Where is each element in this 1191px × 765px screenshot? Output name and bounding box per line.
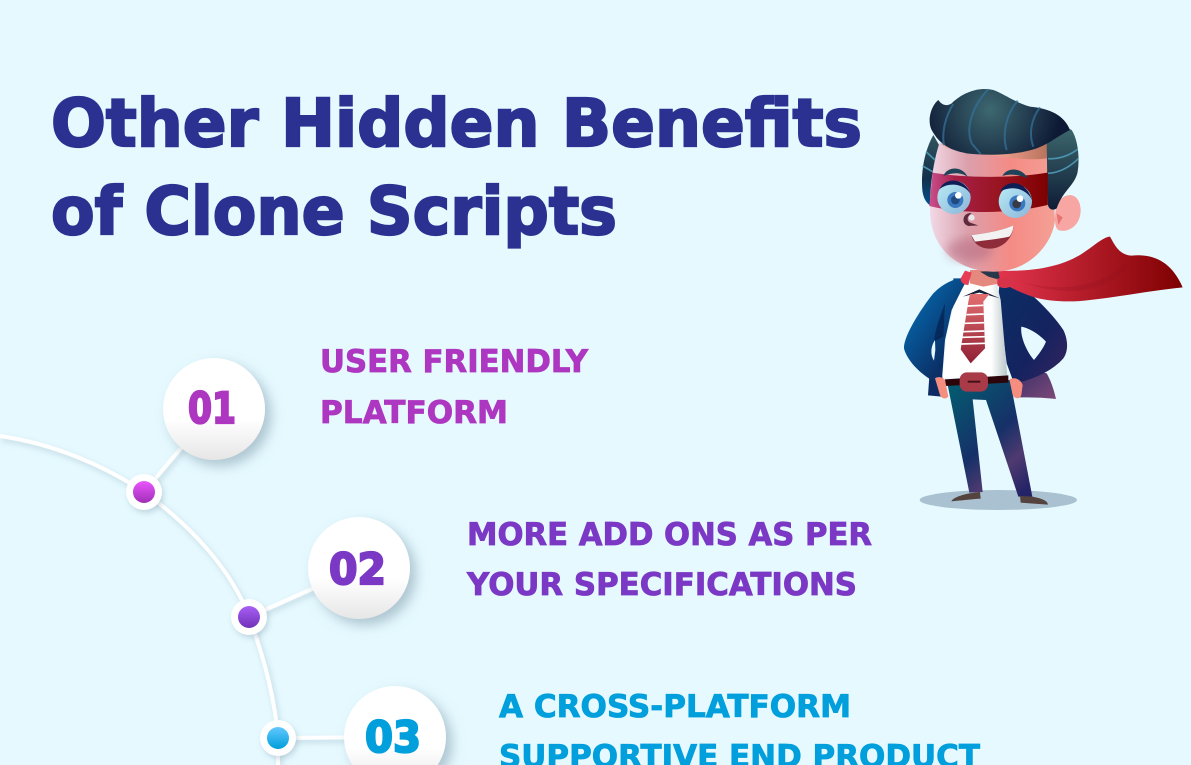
legs — [947, 380, 1032, 497]
label 01: USER FRIENDLY — [320, 344, 589, 380]
back hair — [922, 135, 940, 206]
hands — [935, 377, 948, 398]
shirt — [942, 283, 1007, 378]
number badge 03 — [344, 686, 446, 765]
eyebrows — [943, 168, 1028, 178]
number badge 01: 01 — [188, 384, 236, 434]
number badge 01 — [163, 358, 265, 460]
ground shadow — [920, 490, 1077, 510]
label 02 — [466, 517, 872, 603]
head and cape — [922, 89, 1183, 301]
illustration: superhero businessman — [904, 89, 1183, 510]
number badge 02: 02 — [329, 545, 386, 595]
label 02: MORE ADD ONS AS PER — [467, 517, 872, 553]
collar — [963, 289, 1000, 298]
belt — [945, 375, 1008, 386]
back cape — [1010, 363, 1056, 399]
shoes — [951, 492, 1048, 505]
timeline curve — [0, 409, 395, 765]
label 01 — [320, 344, 589, 431]
label 03 — [499, 689, 980, 765]
body — [904, 278, 1077, 510]
node 02 — [231, 599, 267, 635]
label 03: A CROSS-PLATFORM — [499, 689, 851, 725]
title — [51, 85, 862, 250]
nose — [964, 213, 978, 226]
tie — [961, 294, 989, 363]
step 01 — [126, 344, 589, 510]
hair strands right — [1048, 149, 1078, 173]
node 01 — [126, 474, 162, 510]
cape fold — [1017, 256, 1133, 291]
ear — [1055, 195, 1081, 231]
number badge 03: 03 — [365, 713, 421, 763]
hair top — [930, 89, 1070, 155]
cape — [997, 237, 1183, 301]
collar tips — [961, 271, 972, 285]
title: Other Hidden Benefits — [51, 85, 862, 162]
node 03 — [260, 720, 296, 756]
cheek shade — [947, 238, 993, 262]
eyes — [937, 180, 971, 214]
mouth — [971, 225, 1013, 249]
face — [930, 143, 1055, 272]
hair left strands — [923, 152, 935, 172]
label 01: PLATFORM — [320, 395, 508, 431]
mask — [929, 173, 1048, 212]
arm gap — [931, 327, 1046, 361]
right hair — [1047, 129, 1079, 210]
forehead shadow — [939, 143, 1047, 159]
hair strands — [943, 89, 1040, 154]
number badge 02 — [308, 517, 410, 619]
jacket — [904, 278, 1067, 383]
neck — [970, 270, 1000, 287]
label 02: YOUR SPECIFICATIONS — [466, 567, 857, 603]
step 02 — [231, 517, 872, 635]
jacket fold — [934, 303, 945, 342]
step 03 — [260, 686, 980, 765]
title: of Clone Scripts — [51, 173, 617, 250]
